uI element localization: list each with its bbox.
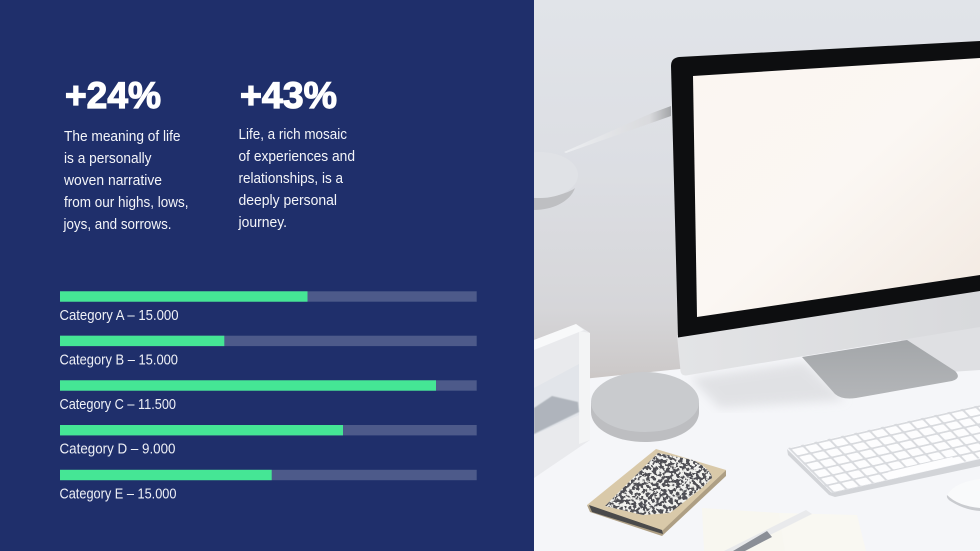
space bar [888,457,954,478]
stat description: mosaic of experiences: deeply personal [238,193,337,209]
icon: monitor stand [802,340,958,398]
monitor bezel [671,41,980,338]
desk surface [534,330,980,551]
bar: Category E [60,470,477,502]
icon: pen [724,510,812,551]
icon: monitor [671,41,980,376]
stat description: mosaic of experiences: Life, a rich mosaic [238,127,347,143]
monitor chin [677,310,968,376]
shadow under monitor [690,362,845,408]
stat description: mosaic of experiences: journey. [238,215,287,231]
icon: acrylic photo frame [534,324,590,478]
stat description: mosaic of experiences: of experiences and [238,149,355,165]
bar: Category D [60,425,477,458]
stat description: meaning of life: woven narrative [63,173,162,189]
stat description: meaning of life [63,129,188,233]
stat description: meaning of life: joys, and sorrows. [63,217,172,233]
icon: open paper notebook [702,508,784,551]
bar: Category C [60,380,477,413]
stat description: mosaic of experiences: relationships, is a [238,171,344,187]
icon: round speaker base [591,372,699,442]
monitor screen [693,58,980,317]
stat block: +24% [63,75,188,233]
bar: Category A [60,291,477,324]
shadow behind stand [900,326,980,372]
stat description: mosaic of experiences [238,127,355,231]
icon: keyboard [787,405,980,497]
bar: Category B: Category B – 15.000 [60,352,178,368]
icon: notebook [587,449,726,536]
bar: Category B [60,336,477,368]
panel: navy background [0,0,534,551]
bar: Category A: Category A – 15.000 [60,308,178,324]
bar: Category E: Category E – 15.000 [60,486,176,502]
stat value: +24%: +24% [65,75,161,116]
stat description: meaning of life: from our highs, lows, [64,195,188,211]
stat value: +43%: +43% [240,75,337,116]
stat description: meaning of life: is a personally [64,151,152,167]
icon: desk lamp head and arm [534,106,671,210]
stat block: +43% [238,75,355,231]
stat description: meaning of life: The meaning of life [64,129,180,145]
panel: desk photo illustration [502,0,980,551]
bar: Category C: Category C – 11.500 [60,397,176,413]
icon: mouse [946,495,980,511]
wall [534,0,980,385]
bar chart: categories [60,291,477,502]
bar: Category D: Category D – 9.000 [60,442,176,458]
